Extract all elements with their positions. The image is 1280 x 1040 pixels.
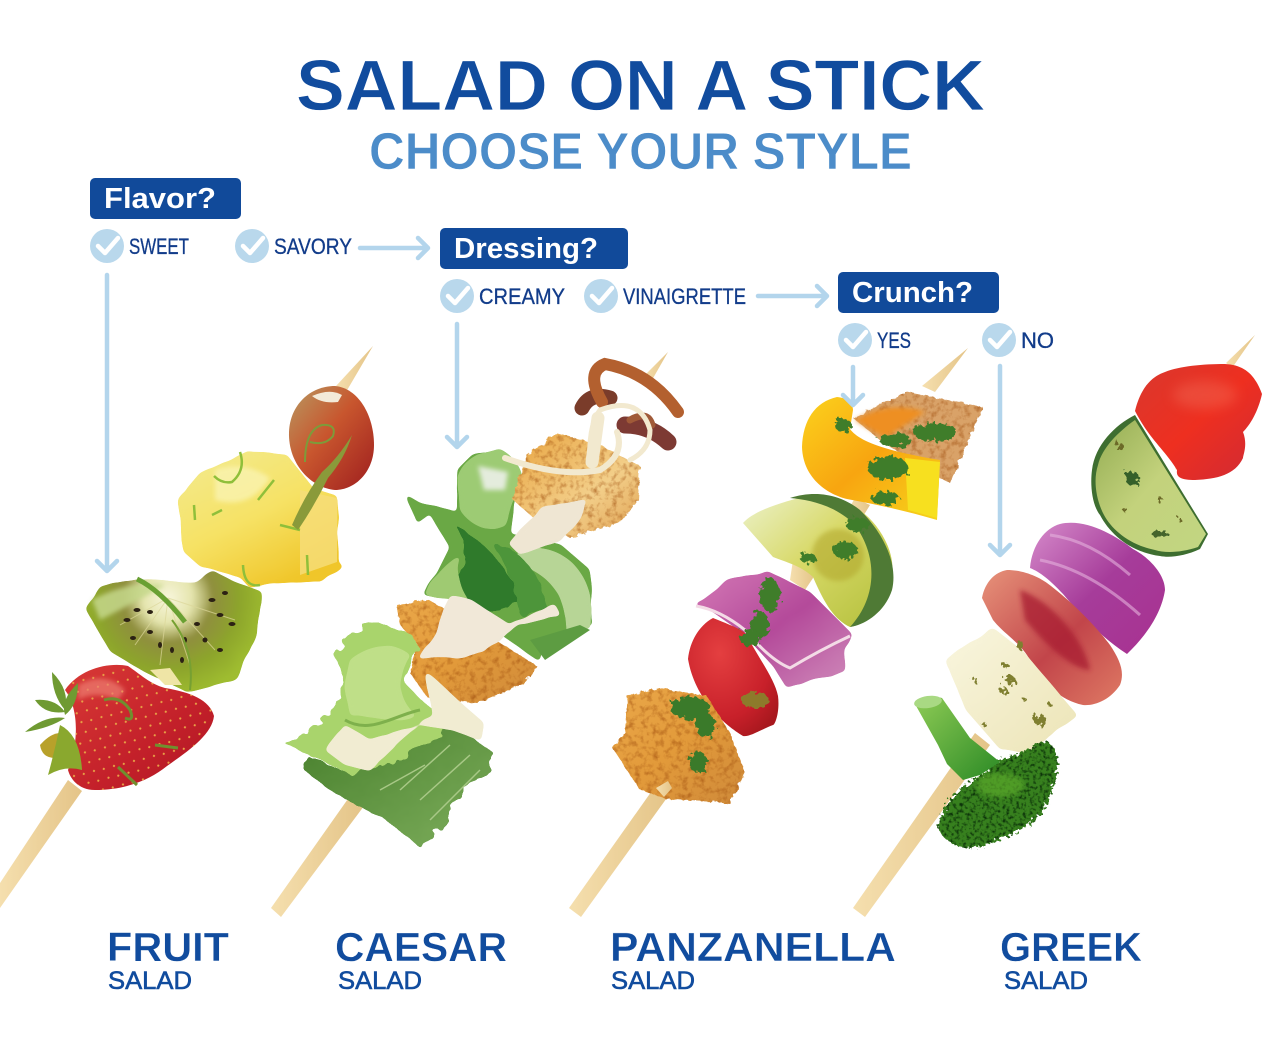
label: fruit salad: [107, 924, 229, 995]
option: sweet: SWEET: [129, 234, 189, 259]
yellow pepper: [802, 397, 940, 520]
roasted tomato: [1135, 364, 1262, 480]
skewer: panzanella salad: [569, 348, 983, 917]
bottom lettuce: [282, 623, 492, 847]
flowchart: crunch question: [838, 272, 999, 313]
arrow: savory to dressing: [360, 238, 428, 258]
stick: [853, 335, 1255, 917]
label: fruit salad: FRUIT: [107, 924, 229, 970]
red onion: [1030, 523, 1165, 654]
cucumber: [1091, 415, 1208, 557]
top lettuce: [405, 449, 592, 662]
label: greek salad: SALAD: [1004, 967, 1088, 995]
skewer: greek salad: [853, 335, 1262, 917]
label: panzanella salad: PANZANELLA: [610, 924, 896, 970]
top crouton: [853, 392, 983, 483]
label: greek salad: GREEK: [1000, 924, 1142, 970]
flowchart: flavor question: [90, 178, 241, 219]
skewer: caesar salad: [271, 352, 678, 917]
red onion: [695, 571, 852, 688]
arrow: vinaigrette to crunch: [758, 286, 827, 306]
label: greek salad: [1000, 924, 1142, 995]
title: SALAD ON A STICK: [296, 47, 985, 126]
label: fruit salad: SALAD: [108, 967, 192, 995]
label: caesar salad: CAESAR: [335, 924, 507, 970]
flowchart: flavor question: Flavor?: [104, 183, 216, 215]
flowchart: crunch question: Crunch?: [852, 277, 973, 309]
cheese ribbons top: [505, 406, 650, 472]
arrow: sweet to fruit: [97, 275, 117, 571]
label: caesar salad: SALAD: [338, 967, 422, 995]
option: no: NO: [1021, 328, 1054, 353]
label: caesar salad: [335, 924, 507, 995]
option: yes: [838, 323, 911, 357]
option: vinaigrette: [584, 279, 746, 313]
top crouton: [512, 433, 640, 538]
dressing bottom: [325, 672, 483, 770]
middle crouton: [397, 599, 537, 703]
grape: [289, 386, 374, 530]
option: savory: SAVORY: [274, 234, 352, 259]
option: savory: [235, 229, 352, 263]
flowchart: dressing question: Dressing?: [454, 233, 598, 265]
option: vinaigrette: VINAIGRETTE: [623, 284, 746, 309]
cheese cube: [945, 628, 1077, 753]
bottom crouton: [612, 688, 745, 803]
label: panzanella salad: SALAD: [611, 967, 695, 995]
skewer: fruit salad: [0, 346, 374, 908]
dressing top: [507, 499, 587, 555]
strawberry leaves: [25, 672, 82, 775]
option: creamy: CREAMY: [479, 284, 565, 309]
stick: [569, 348, 968, 917]
anchovy: [582, 364, 678, 442]
stick: [271, 352, 668, 917]
cucumber: [743, 494, 893, 627]
option: creamy: [440, 279, 565, 313]
pineapple: [178, 451, 343, 588]
kiwi: [85, 571, 262, 692]
label: panzanella salad: [610, 924, 896, 995]
arrow: yes to panzanella: [843, 367, 863, 405]
pesto on pepper: [835, 418, 957, 505]
strawberry: [65, 665, 214, 790]
arrow: creamy to caesar: [447, 324, 467, 447]
option: no: [982, 323, 1054, 357]
stick: [0, 346, 373, 908]
broccoli floret: [938, 741, 1058, 848]
option: yes: YES: [877, 328, 911, 353]
flowchart: dressing question: [440, 228, 628, 269]
cherry tomato: [688, 618, 778, 736]
arrow: no to greek: [990, 366, 1010, 555]
subtitle: CHOOSE YOUR STYLE: [369, 123, 912, 181]
salami: [982, 570, 1122, 705]
option: sweet: [90, 229, 189, 263]
broccoli stem: [913, 694, 1000, 780]
dressing middle: [417, 595, 560, 658]
